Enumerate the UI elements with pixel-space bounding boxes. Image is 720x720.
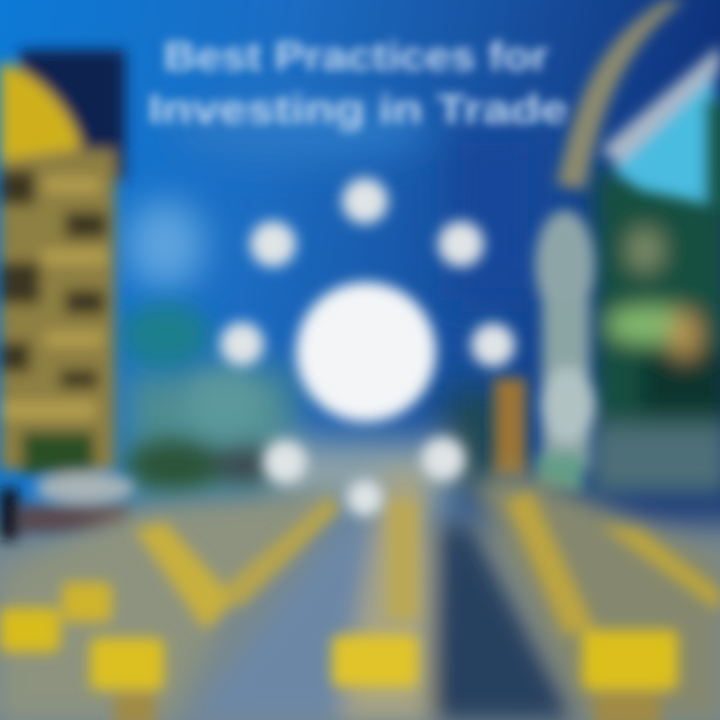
title [148, 33, 568, 132]
brown column [494, 378, 526, 478]
title line 2: Investing in Trade [148, 86, 568, 132]
yellow lane markers [0, 492, 720, 720]
distant teal trees [120, 303, 275, 491]
road and yellow lane markers [0, 470, 720, 720]
central circle [296, 282, 436, 422]
left building [0, 50, 135, 540]
right tower and arch [535, 0, 685, 493]
hazy clouds [125, 100, 540, 300]
right green scene [590, 170, 720, 495]
ground band [0, 370, 720, 720]
right glass roof [600, 45, 720, 210]
outer node circles [220, 178, 515, 516]
circular diagram [220, 178, 515, 516]
title line 1: Best Practices for [164, 33, 549, 79]
